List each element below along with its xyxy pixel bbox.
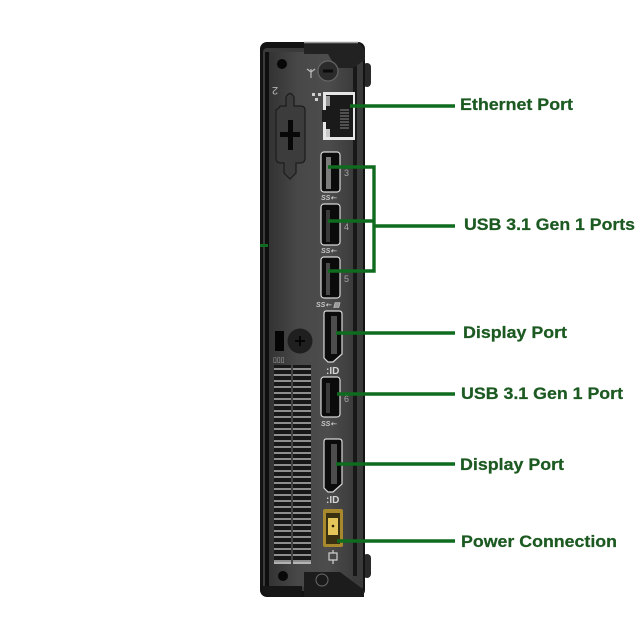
leader: USB port 6 [337,392,455,396]
USB port 4: 4 [344,222,349,232]
Display port lower [324,439,342,506]
USB port 5: 5 [344,274,349,284]
outer case [260,42,365,597]
USB port 6: 6 [344,394,349,404]
USB port 3: SS⇠ [321,195,337,202]
label: Power Connection: Power Connection [461,532,617,551]
USB port 4: SS⇠ [321,248,337,255]
left dark channel [265,52,269,587]
bottom round button [316,574,328,586]
antenna connector [307,61,338,81]
USB port 3 [321,152,349,202]
bottom left screw hole [278,571,288,581]
label: USB 3.1 Gen 1 Port: USB 3.1 Gen 1 Port [461,384,623,403]
Display port upper [324,311,342,377]
power connector [323,509,343,564]
USB port 6 [321,377,349,428]
Kensington lock slot: ▯▯▯ [273,357,285,364]
leader bracket: USB 3.1 ports [328,167,455,271]
USB port 5 [316,257,349,309]
Kensington lock slot [273,331,285,364]
top edge highlight [304,42,358,44]
right dark channel [353,66,357,576]
leader: Display Port upper [336,331,455,335]
leader: Ethernet [350,104,455,108]
small green mark [260,244,268,247]
top left screw hole [277,59,287,69]
option slot 2: 2 [272,84,278,96]
ventilation grille [274,365,311,563]
Display port lower: :ID [326,495,339,506]
leader: Power [337,539,455,543]
label: Ethernet Port: Ethernet Port [460,95,573,114]
thumb screw [288,328,312,354]
USB port 3: 3 [344,168,349,178]
label: Display Port upper: Display Port [463,323,567,342]
rear panel [263,48,363,591]
USB port 5: SS⇠ ▤ [316,302,341,309]
bottom cap [304,572,364,597]
Ethernet port [312,92,355,140]
bottom left wall [263,586,302,597]
Display port upper: :ID [326,366,339,377]
option slot 2 [272,84,305,179]
main face [269,52,353,587]
top cap [304,42,365,68]
USB port 4 [321,204,349,255]
label: Display Port lower: Display Port [460,455,564,474]
USB port 6: SS⇠ [321,421,337,428]
computer chassis [260,42,371,597]
label: USB 3.1 Gen 1 Ports: USB 3.1 Gen 1 Ports [464,215,635,234]
right side feet [363,63,371,578]
leader: Display Port lower [336,462,455,466]
